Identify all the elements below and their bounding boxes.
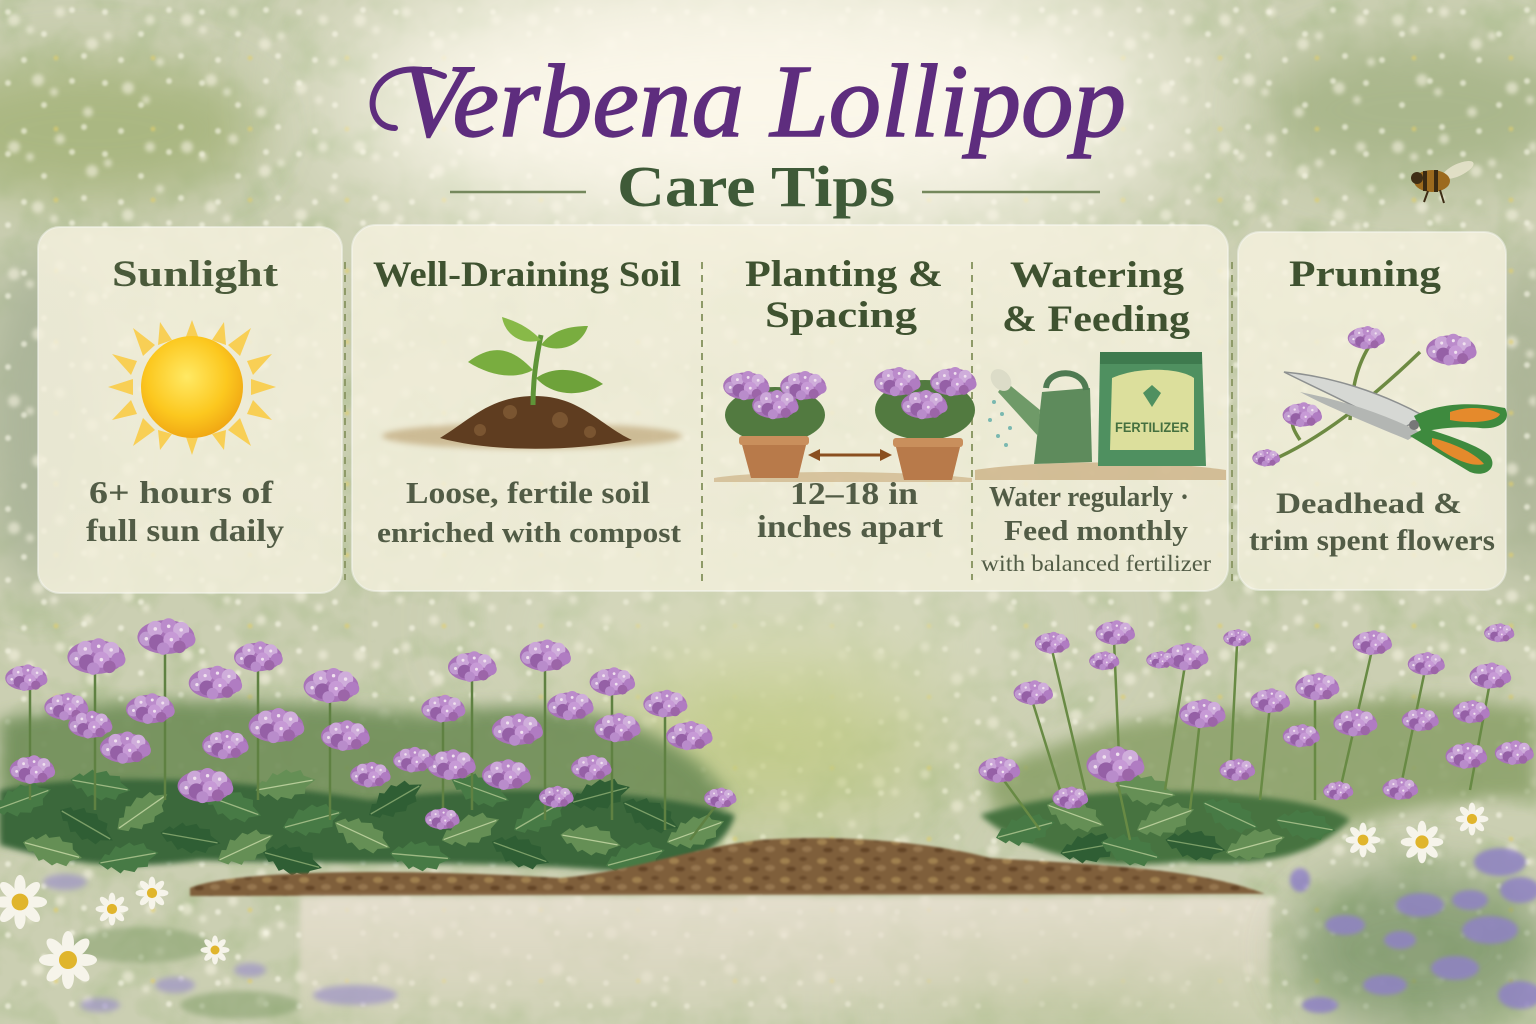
text: pruning xyxy=(1249,487,1495,557)
text: sunlight: full sun daily xyxy=(86,512,284,548)
text: soil xyxy=(377,475,682,549)
panel: sunlight xyxy=(38,227,342,593)
heading: watering xyxy=(1002,255,1191,340)
heading: soil: Well-Draining Soil xyxy=(373,254,681,294)
heading: watering: Watering xyxy=(1010,255,1185,296)
text: watering: Water regularly · xyxy=(989,481,1189,513)
dividers xyxy=(345,262,1232,584)
text: sunlight: 6+ hours of xyxy=(89,474,273,510)
heading: planting: Planting & xyxy=(745,254,943,295)
panel: pruning xyxy=(1238,232,1506,590)
icon: pruning shears and verbena stems xyxy=(1252,326,1507,474)
text: sunlight xyxy=(86,474,284,548)
subtitle: Care Tips xyxy=(617,154,895,219)
heading: watering: & Feeding xyxy=(1002,299,1191,340)
icon: seedling in soil xyxy=(382,317,682,449)
text: soil: Loose, fertile soil xyxy=(406,475,650,510)
wildflowers bottom left xyxy=(0,874,397,1019)
icon: watering can and fertilizer bag xyxy=(975,352,1226,480)
subtitle rules xyxy=(450,191,1100,193)
heading: pruning: Pruning xyxy=(1289,254,1442,295)
flower bed: left verbena xyxy=(0,618,737,883)
heading: planting xyxy=(745,254,943,336)
icon: sun xyxy=(108,320,276,455)
text: planting xyxy=(757,475,943,544)
text: watering: Feed monthly xyxy=(1004,515,1189,547)
wildflowers bottom right xyxy=(1290,803,1536,1024)
heading: sunlight: Sunlight xyxy=(112,254,279,295)
soil path xyxy=(190,838,1265,896)
text: planting: inches apart xyxy=(757,508,943,544)
text: planting: 12–18 in xyxy=(790,475,918,511)
flower bed: right verbena xyxy=(978,620,1536,873)
pale foreground path xyxy=(300,897,1270,1024)
icon: two potted plants with spacing arrow xyxy=(714,367,977,482)
icon: watering can and fertilizer bag: FERTILIZER xyxy=(1115,419,1189,435)
text: watering xyxy=(981,481,1211,576)
text: soil: enriched with compost xyxy=(377,518,682,549)
text: pruning: trim spent flowers xyxy=(1249,524,1495,557)
text: pruning: Deadhead & xyxy=(1276,487,1462,520)
title: Verbena Lollipop xyxy=(400,44,1126,159)
icon: bee xyxy=(1411,157,1476,203)
heading: planting: Spacing xyxy=(765,295,918,336)
panel: four-column care card xyxy=(352,225,1228,591)
text: watering: with balanced fertilizer xyxy=(981,551,1211,576)
